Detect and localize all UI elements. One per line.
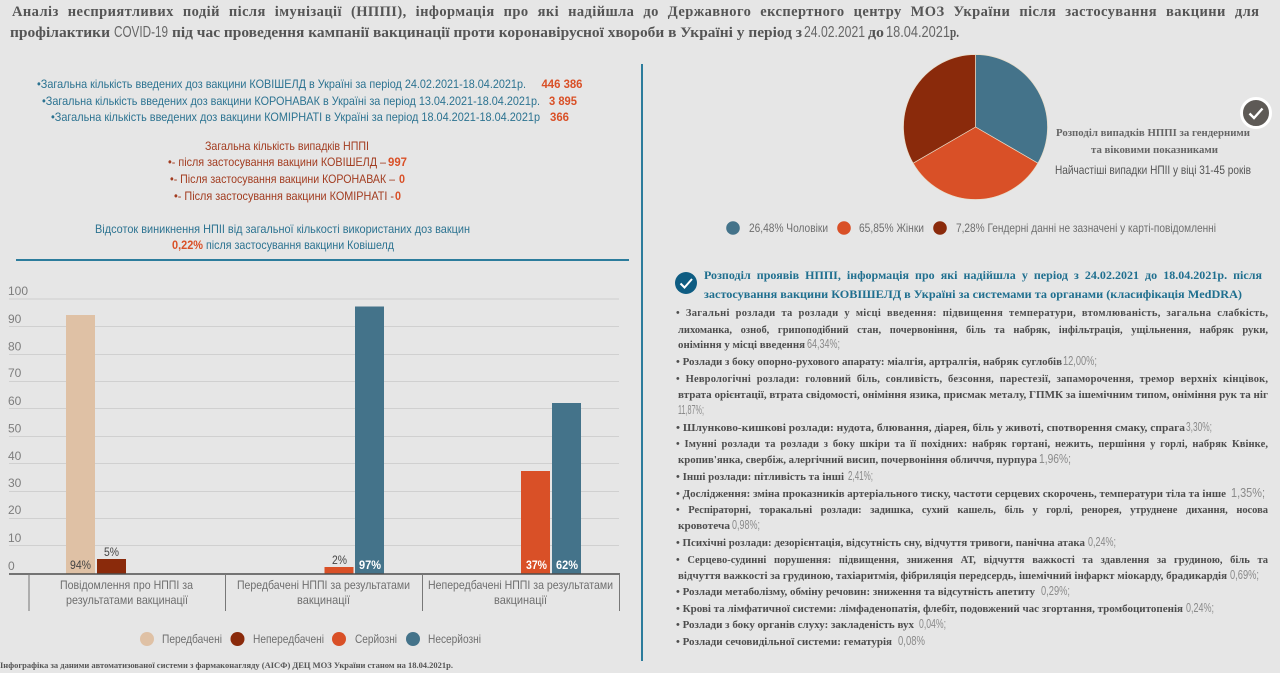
- text block: manifestations list: втрата орієнтації, втрата свідомості, оніміння язика, присмак металу, ГПМК за ішемічним типом, оніміння рук та ніг: [678, 390, 1268, 401]
- bar value labels: 62%: [556, 558, 578, 572]
- footer source note: Інфографіка за даними автоматизованої системи з фармаконагляду (АІСФ) ДЕЦ МОЗ України станом на 18.04.2021р.: [0, 661, 453, 670]
- pie legend: [726, 221, 1216, 235]
- y axis labels: 80: [8, 340, 22, 354]
- text block: manifestations list: 64,34%;: [807, 337, 840, 351]
- pie caption: Розподіл випадків НППІ за гендерними: [1056, 127, 1251, 139]
- title: до: [868, 25, 884, 41]
- title: Аналіз несприятливих подій після імунізації (НППІ), інформація про які надійшла до Державного експертного центру МОЗ України після застосування вакцини для: [12, 4, 1259, 20]
- text block: manifestations list: 3,30%;: [1186, 420, 1212, 434]
- bar value labels: 94%: [70, 558, 91, 572]
- y axis labels: 100: [8, 284, 28, 298]
- text block: total AEFI cases: [168, 139, 407, 203]
- category labels: Непередбачені НППІ за результатами: [428, 578, 613, 592]
- text block: manifestations list: • Серцево-судинні порушення: підвищення, зниження АТ, відчуття важкості та здавлення за грудиною, біль та: [676, 555, 1269, 566]
- text block: manifestations list: 0,24%;: [1088, 535, 1116, 549]
- text block: manifestations list: • Розлади метаболізму, обміну речовин: зниження та відсутність апетиту: [676, 587, 1036, 598]
- title: р.: [950, 25, 959, 41]
- text block: doses administered: •Загальна кількість введених доз вакцини КОМІРНАТІ в Україні за період 18.04.2021-18.04.2021р: [51, 110, 540, 124]
- bar chart legend: Несерйозні: [428, 632, 481, 646]
- pie caption: [1055, 127, 1251, 177]
- text block: AEFI percentage: [95, 222, 470, 252]
- text block: doses administered: 366: [550, 110, 569, 124]
- text block: manifestations list: • Імунні розлади та розлади з боку шкіри та її похідних: набряк гортані, нежить, першіння у горлі, набряк Квінке,: [676, 439, 1268, 450]
- text block: manifestations list: 0,69%;: [1230, 568, 1259, 582]
- y axis labels: 10: [8, 531, 22, 545]
- y axis labels: 90: [8, 312, 22, 326]
- y axis labels: 50: [8, 422, 22, 436]
- bars: expected: [324, 306, 384, 574]
- text block: manifestations list: оніміння у місці введення: [678, 340, 805, 351]
- icon: grey check badge: [1242, 98, 1270, 128]
- text block: manifestations list: • Розлади з боку органів слуху: закладеність вух: [676, 620, 915, 631]
- text block: manifestations list: • Неврологічні розлади: головний біль, сонливість, безсоння, парестезії, запаморочення, тремор верхніх кінцівок,: [676, 374, 1268, 385]
- text block: manifestations list: 2,41%;: [848, 469, 873, 483]
- title: 24.02.2021: [804, 24, 865, 41]
- bar chart: [8, 284, 620, 611]
- bar chart legend: [140, 632, 481, 646]
- pie legend: 7,28% Гендерні данні не зазначені у карті-повідомленні: [956, 221, 1216, 235]
- text block: manifestations list: • Розлади сечовидільної системи: гематурія: [676, 637, 892, 648]
- bars: reports: [66, 315, 126, 574]
- y axis labels: 0: [8, 559, 15, 573]
- bar value labels: [70, 545, 578, 572]
- text block: manifestations list: • Респіраторні, торакальні розлади: задишка, сухий кашель, біль у горлі, ренорея, утруднене дихання, носова: [676, 505, 1269, 516]
- bar value labels: 37%: [526, 558, 547, 572]
- y axis labels: 40: [8, 449, 22, 463]
- text block: manifestations list: 0,04%;: [919, 617, 946, 631]
- text block: total AEFI cases: Загальна кількість випадків НППІ: [205, 139, 369, 153]
- category labels: [60, 578, 613, 607]
- text block: manifestations list: 11,87%;: [678, 403, 704, 417]
- text block: manifestations list: 0,24%;: [1186, 601, 1214, 615]
- text block: manifestations list: 1,96%;: [1039, 452, 1071, 466]
- text block: manifestations list: • Дослідження: зміна проказників артеріального тиску, частоти серцевих скорочень, температури тіла та інше: [676, 489, 1226, 500]
- bar chart legend: Передбачені: [162, 632, 222, 646]
- text block: manifestations list: • Загальні розлади та розлади у місці введення: підвищення температури, втомлюваність, загальна слабкість,: [676, 308, 1268, 319]
- text block: doses administered: •Загальна кількість введених доз вакцини КОРОНАВАК в Україні за період 13.04.2021-18.04.2021р.: [42, 94, 540, 108]
- text block: doses administered: [37, 77, 583, 124]
- text block: AEFI percentage: 0,22%: [172, 238, 203, 252]
- title: 18.04.2021: [886, 24, 950, 41]
- title: COVID-19: [114, 24, 168, 41]
- pie legend: 65,85% Жінки: [859, 221, 924, 235]
- text block: manifestations list: • Шлунково-кишкові розлади: нудота, блювання, діарея, біль у животі, спотворення смаку, спрага: [676, 423, 1186, 434]
- heading: manifestations by system: [704, 268, 1262, 301]
- text block: AEFI percentage: Відсоток виникнення НПІІ від загальної кількості використаних доз вакцин: [95, 222, 470, 236]
- text block: total AEFI cases: •- Після застосування вакцини КОРОНАВАК –: [170, 172, 395, 186]
- text block: manifestations list: 1,35%;: [1231, 486, 1265, 500]
- text block: manifestations list: 0,08%: [898, 634, 925, 648]
- category labels: вакцинації: [494, 593, 548, 607]
- y axis labels: 30: [8, 476, 22, 490]
- bar value labels: 2%: [332, 553, 347, 567]
- y axis labels: 20: [8, 503, 22, 517]
- category labels: результатами вакцинації: [66, 593, 189, 607]
- text block: total AEFI cases: 0: [399, 172, 405, 186]
- title: [10, 4, 1259, 41]
- text block: manifestations list: [676, 308, 1269, 648]
- heading: manifestations by system: Розподіл проявів НППІ, інформація про які надійшла у період з 24.02.2021 до 18.04.2021р. після: [704, 268, 1262, 282]
- text block: doses administered: 446 386: [542, 77, 583, 91]
- text block: total AEFI cases: 997: [388, 155, 407, 169]
- text block: total AEFI cases: 0: [395, 189, 401, 203]
- text block: manifestations list: • Інші розлади: пітливість та інші: [676, 472, 844, 483]
- text block: manifestations list: кропив'янка, свербіж, алергічний висип, почервоніння обличчя, пурпура: [678, 455, 1038, 466]
- text block: manifestations list: 0,98%;: [732, 518, 760, 532]
- text block: manifestations list: 12,00%;: [1063, 354, 1097, 368]
- text block: manifestations list: • Розлади з боку опорно-рухового апарату: міалгія, артралгія, набряк суглобів: [676, 357, 1062, 368]
- icon: blue check badge: [675, 272, 697, 294]
- text block: manifestations list: • Психічні розлади: дезорієнтація, відсутність сну, відчуття тривоги, панічна атака: [676, 538, 1086, 549]
- text block: AEFI percentage: після застосування вакцини Ковішелд: [206, 238, 394, 252]
- category labels: Передбачені НППІ за результатами: [237, 578, 410, 592]
- title: профілактики: [10, 25, 110, 41]
- text block: doses administered: •Загальна кількість введених доз вакцини КОВІШЕЛД в Україні за період 24.02.2021-18.04.2021р.: [37, 77, 526, 91]
- pie caption: та віковими показниками: [1091, 144, 1219, 156]
- text block: total AEFI cases: •- Після застосування вакцини КОМІРНАТІ -: [174, 189, 394, 203]
- y axis labels: [8, 284, 28, 573]
- text block: manifestations list: 0,29%;: [1041, 584, 1070, 598]
- y axis labels: 60: [8, 394, 22, 408]
- category labels: вакцинації: [297, 593, 351, 607]
- text block: total AEFI cases: •- після застосування вакцини КОВІШЕЛД –: [168, 155, 386, 169]
- text block: manifestations list: • Крові та лімфатичної системи: лімфаденопатія, флебіт, подовжений час згортання, тромбоцитопенія: [676, 604, 1183, 615]
- pie chart: [903, 54, 1048, 200]
- text block: manifestations list: відчуття важкості за грудиною, тахіаритмія, фібриляція передсердь, ішемічний інфаркт міокарду, брадикардія: [678, 571, 1227, 582]
- text block: doses administered: 3 895: [549, 94, 577, 108]
- text block: manifestations list: лихоманка, озноб, грипоподібний стан, почервоніння, біль та набряк, інфільтрація, ущільнення, набряк руки,: [678, 325, 1268, 336]
- text block: manifestations list: кровотеча: [678, 521, 731, 532]
- bar value labels: 5%: [104, 545, 119, 559]
- category labels: Повідомлення про НППІ за: [60, 578, 193, 592]
- bar chart legend: Непередбачені: [253, 632, 324, 646]
- bars: unexpected: [521, 403, 581, 574]
- bar value labels: 97%: [359, 558, 381, 572]
- pie legend: 26,48% Чоловіки: [749, 221, 828, 235]
- heading: manifestations by system: застосування вакцини КОВІШЕЛД в Україні за системами та органами (класифікація MedDRA): [704, 287, 1242, 301]
- bar chart legend: Серйозні: [355, 632, 397, 646]
- title: під час проведення кампанії вакцинації проти коронавірусної хвороби в Україні у період з: [172, 25, 802, 41]
- y axis labels: 70: [8, 366, 22, 380]
